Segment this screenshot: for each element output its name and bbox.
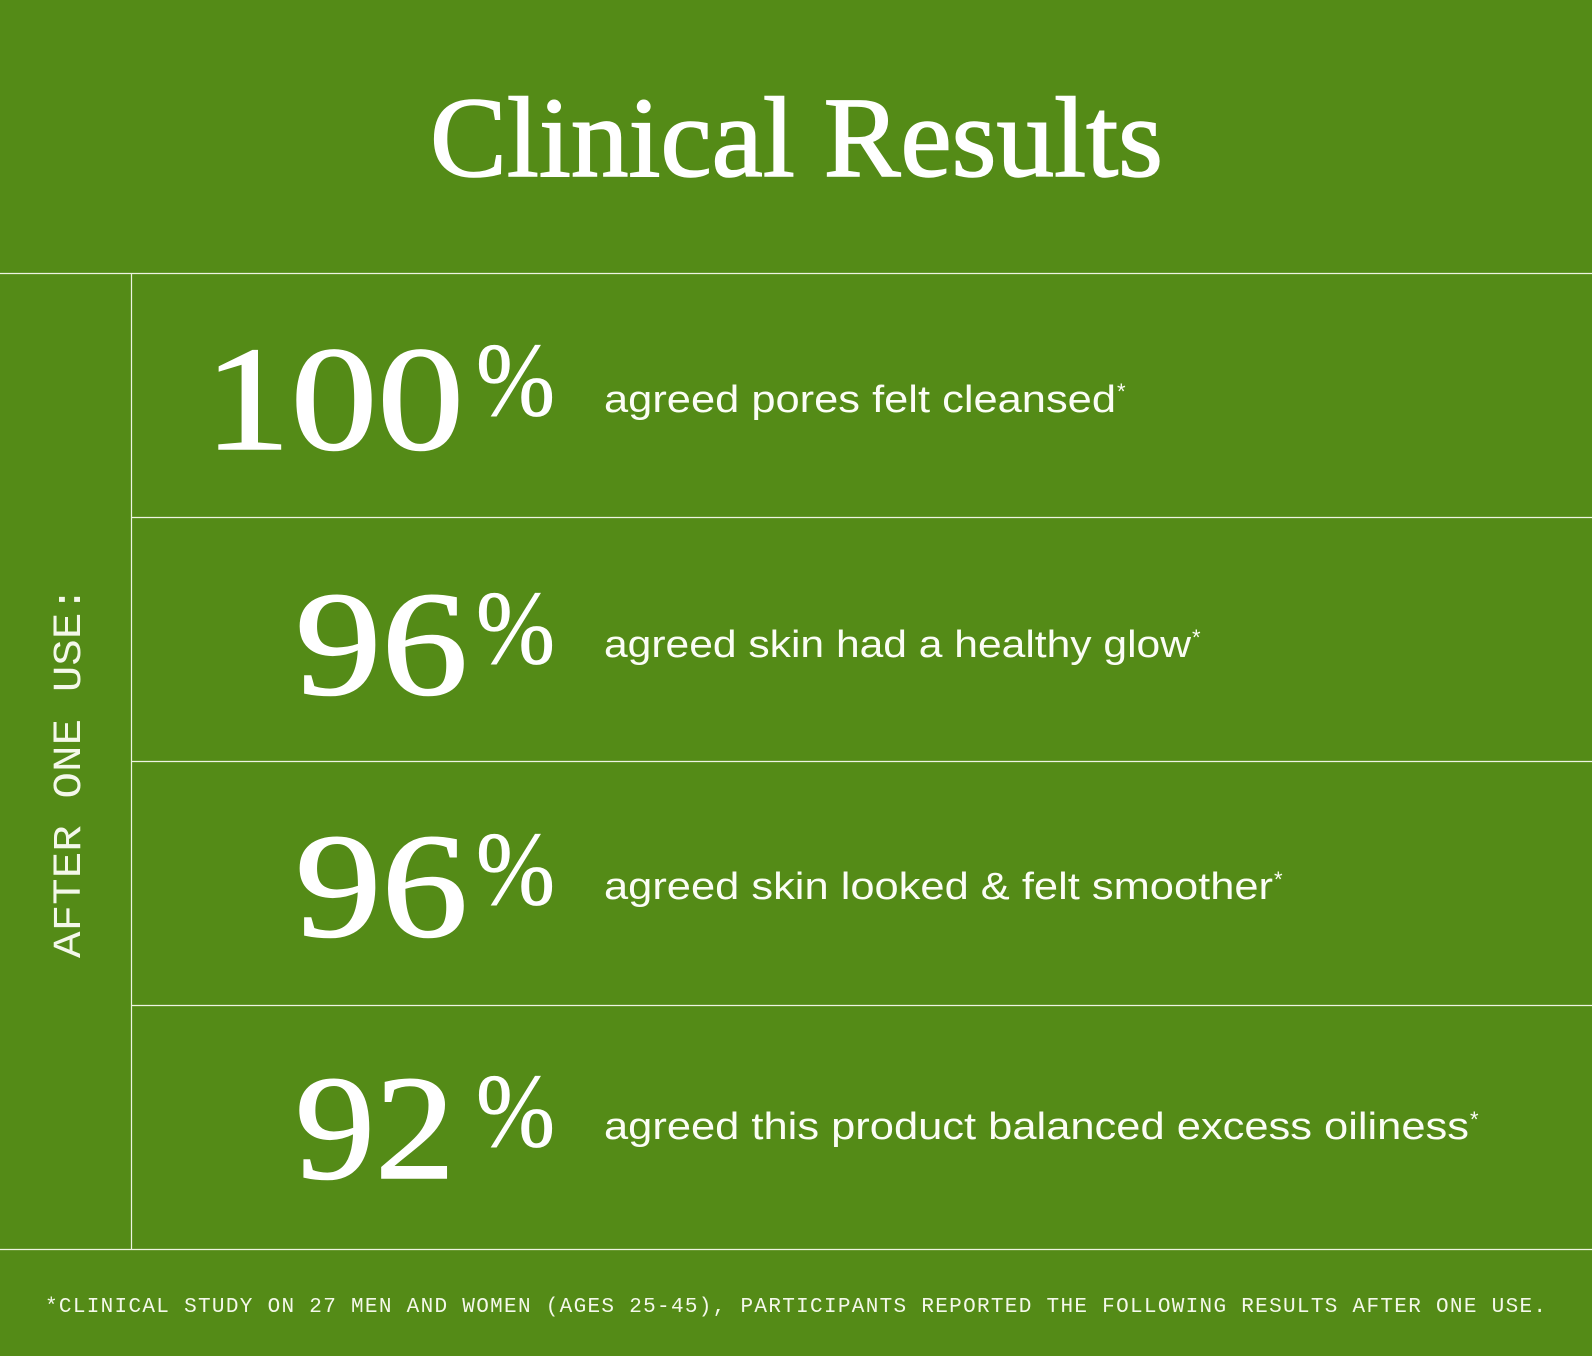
row: 92 percent (295, 1046, 1479, 1211)
stat: 96%: 96 (295, 804, 468, 969)
stat: 96%: % (476, 810, 555, 927)
stat: 96%: % (476, 569, 555, 686)
row: 96 percent smoother (295, 804, 1283, 969)
stat: 92%: 92 (295, 1046, 455, 1211)
description: oiliness: * (1470, 1107, 1479, 1132)
row: 100 percent (204, 317, 1126, 482)
stat: 96% (295, 562, 555, 727)
side label: after one use: AFTER ONE USE: (48, 586, 93, 958)
footnote: *CLINICAL STUDY ON 27 MEN AND WOMEN (AGES 25-45), PARTICIPANTS REPORTED THE FOLLOWING RESULTS AFTER ONE USE. (45, 1296, 1546, 1319)
description: glow: agreed skin had a healthy glow (604, 624, 1192, 666)
stat: 92% (295, 1046, 555, 1211)
description: oiliness: agreed this product balanced excess oiliness (604, 1106, 1469, 1148)
stat: 96% (295, 804, 555, 969)
stat: 92%: % (476, 1052, 555, 1169)
description: glow: * (1192, 625, 1201, 650)
stat: 100%: 100 (204, 317, 464, 482)
stat: 100%: % (476, 321, 555, 438)
stat: 96%: 96 (295, 562, 468, 727)
description: smoother: agreed skin looked & felt smoother (604, 866, 1273, 908)
description: pores: * (1117, 379, 1126, 404)
description: pores: agreed pores felt cleansed (604, 379, 1116, 421)
description: smoother: * (1274, 867, 1283, 892)
row: 96 percent glow (295, 562, 1201, 727)
stat: 100% (204, 317, 555, 482)
title: Clinical Results (430, 74, 1163, 201)
